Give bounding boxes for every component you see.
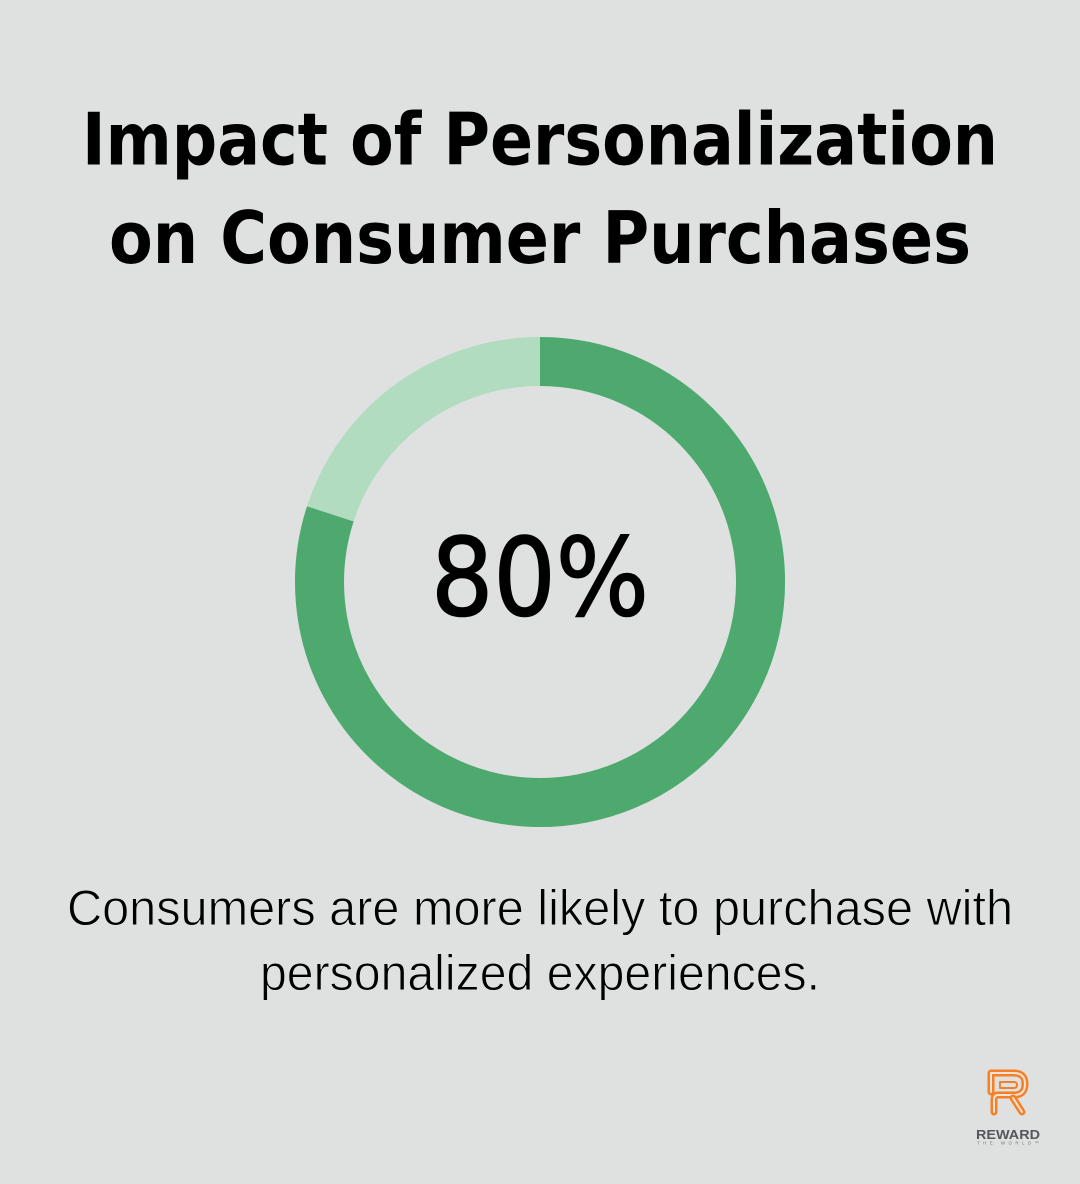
chart segment: 80% xyxy=(320,362,761,802)
donut chart xyxy=(320,362,761,802)
description: Consumers are more likely to purchase with xyxy=(67,880,1013,936)
logo: Reward the World xyxy=(976,1073,1040,1146)
description xyxy=(67,880,1013,1001)
logo wordmark: REWARD xyxy=(976,1127,1040,1142)
title: on Consumer Purchases xyxy=(109,196,971,280)
logo tagline: THE WORLD™ xyxy=(977,1140,1039,1146)
donut value: 80% xyxy=(431,516,649,641)
description: personalized experiences. xyxy=(260,945,820,1001)
title xyxy=(82,98,998,280)
icon: R mark xyxy=(991,1073,1025,1112)
chart track: remaining 20% xyxy=(320,362,760,802)
